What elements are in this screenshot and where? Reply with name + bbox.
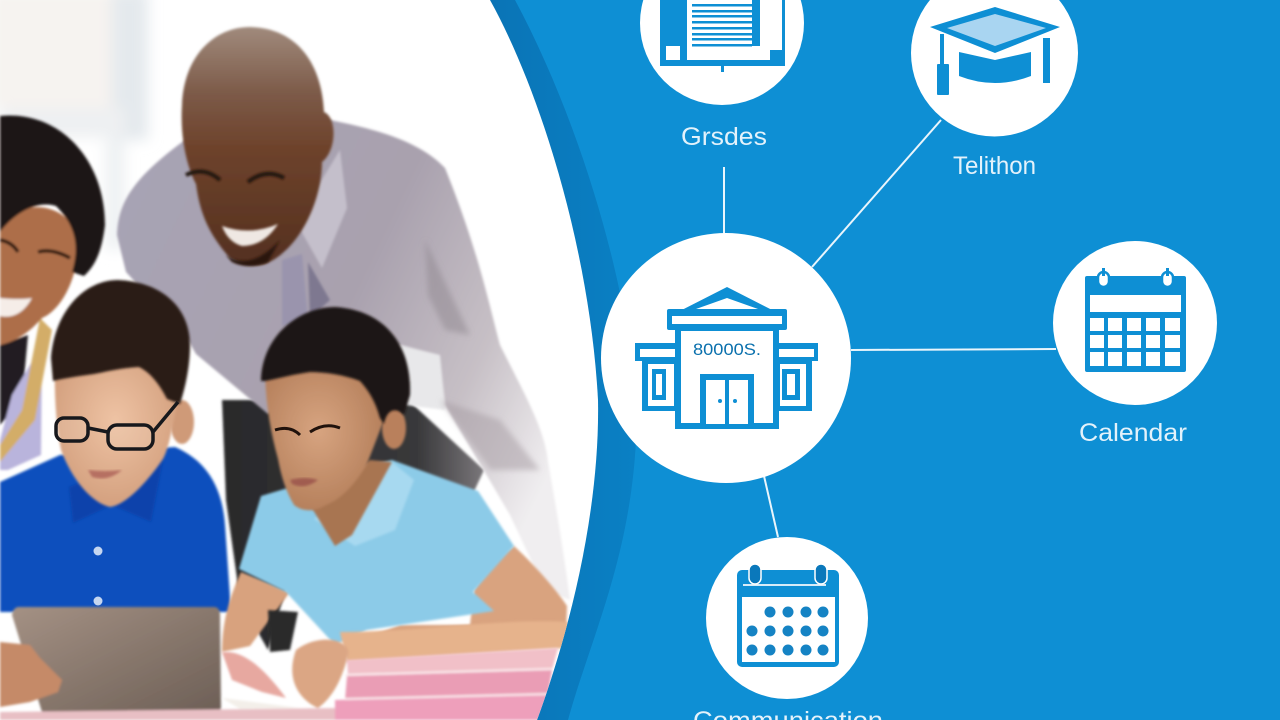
man face highlights and features [186,171,284,266]
boy face [55,350,176,507]
boy shirt light [239,460,514,645]
boy with glasses [0,280,231,612]
label: tuition: Telithon [953,152,1036,180]
woman mouth [0,298,32,317]
label: grades: Grsdes [681,123,767,151]
icon: document [660,0,785,72]
node: communication [693,537,883,720]
boy hair [51,280,190,404]
man shirt [117,120,570,600]
hands [222,652,286,698]
woman hair [0,116,105,276]
icon: graduation cap [930,7,1060,95]
node: central school [601,233,851,483]
node: tuition [911,0,1078,180]
boy neck [310,460,392,546]
man trousers [222,400,484,650]
icon: calendar grid [1085,268,1186,372]
tablet [12,607,221,712]
woman: parent [0,116,105,470]
stack of pink books [347,648,558,676]
boy forearm over books [340,621,568,662]
sign text: 80000S. [693,340,761,359]
boy right arm [380,545,569,636]
boy ear [382,407,406,449]
icon: school building [635,287,818,429]
photo: teacher, parent and two children at a tablet [0,0,600,720]
boy ear [170,400,194,444]
boy in light blue [222,307,568,662]
window backdrop [0,0,148,250]
boy face light [265,365,384,510]
woman torso [0,335,28,425]
boy left arm [222,572,290,652]
node: grades [640,0,804,151]
node: calendar [1053,241,1217,447]
boy glasses [56,402,178,449]
man head [182,27,334,265]
connector lines [724,120,1056,537]
dark curved band [490,0,636,720]
man: teacher [117,27,570,650]
desk surface and tablet [0,607,558,720]
boy shirt [0,447,231,612]
boy hair light [261,307,410,424]
hand left [0,642,62,707]
shirt folds [425,240,540,470]
desk [0,708,340,720]
label: calendar: Calendar [1079,419,1187,447]
woman face [0,207,78,345]
boy mouth [88,470,122,478]
man collar and tie [282,150,347,326]
chair gap [268,610,298,652]
shirt tail [400,345,446,410]
icon: dotted calendar [737,564,839,667]
